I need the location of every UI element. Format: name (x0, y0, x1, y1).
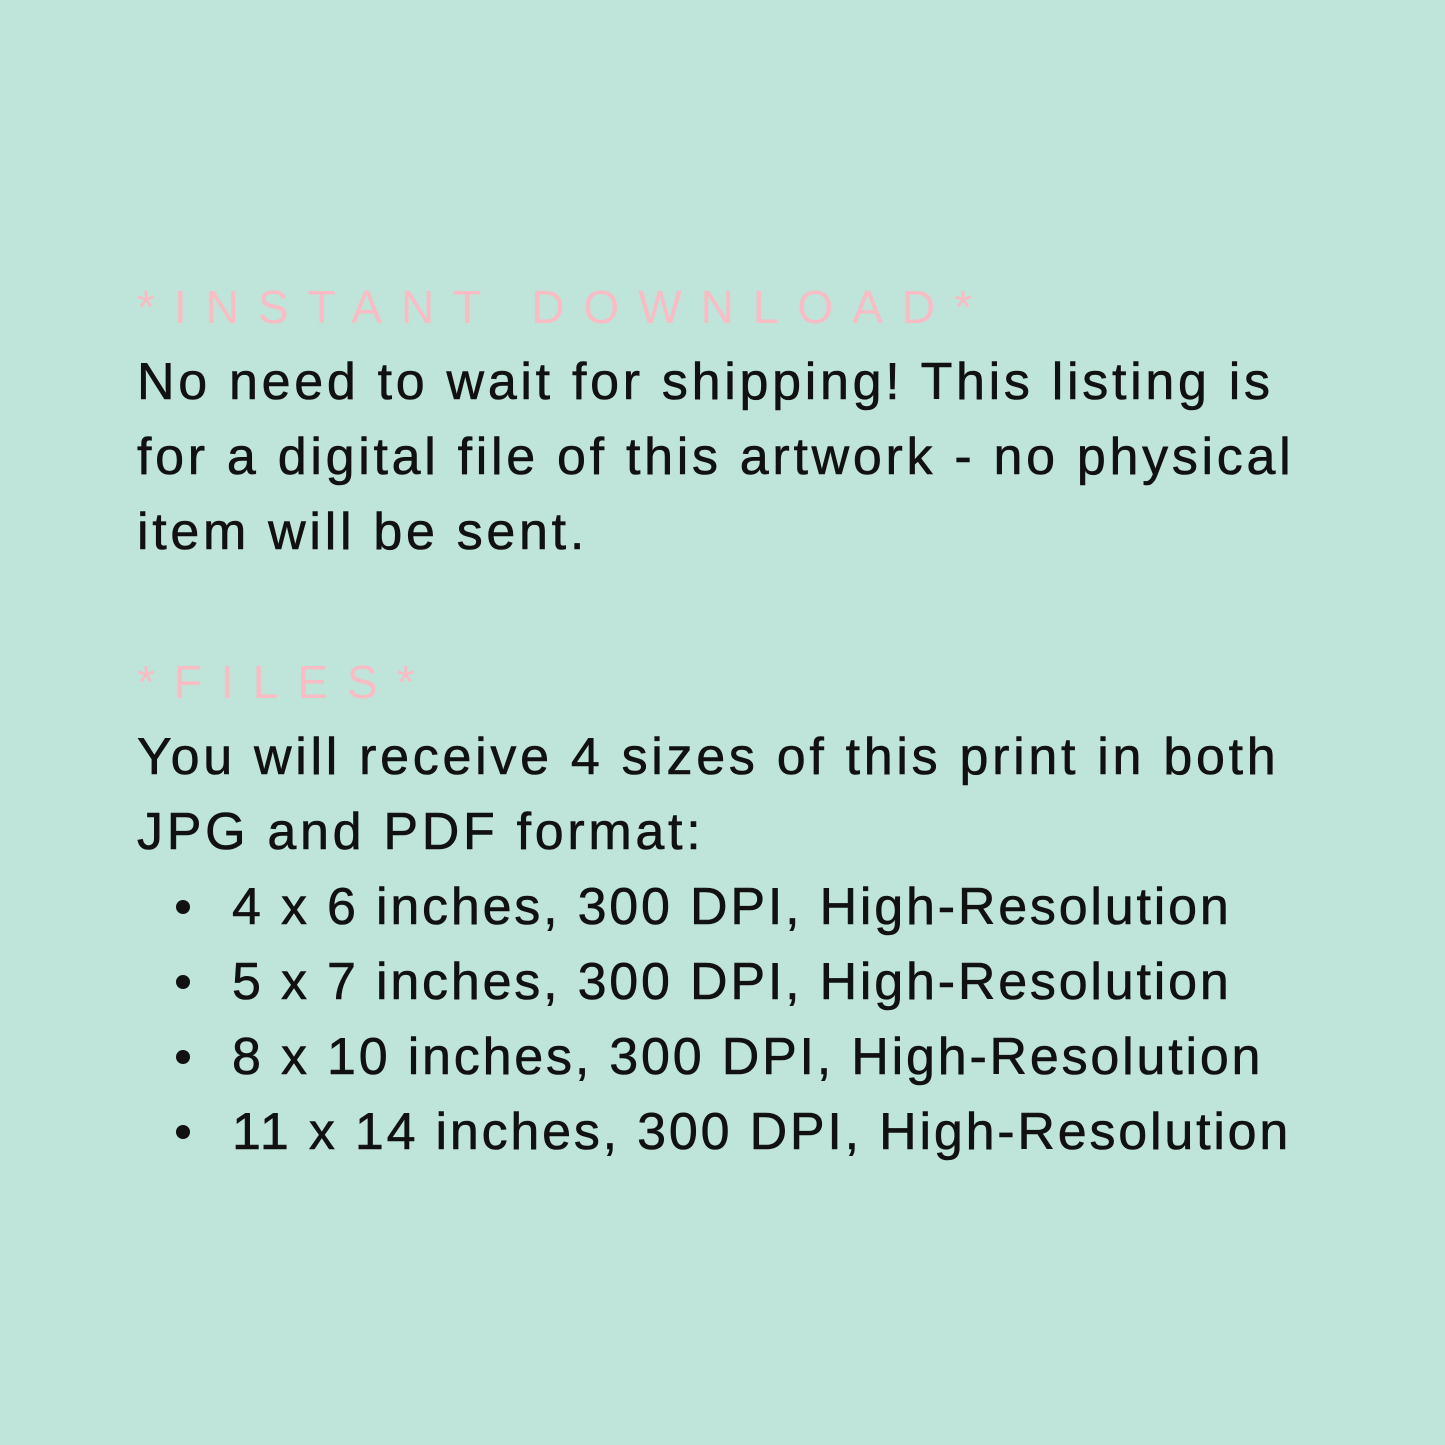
text block: files description: JPG and PDF format: (137, 803, 704, 861)
text block: instant download description (137, 353, 1294, 561)
list: file sizes: 11 x 14 inches, 300 DPI, High-Resolution (232, 1103, 1291, 1161)
list: file sizes: 5 x 7 inches, 300 DPI, High-Resolution (232, 953, 1232, 1011)
text block: instant download description: No need to wait for shipping! This listing is (137, 353, 1274, 411)
list: file sizes: 8 x 10 inches, 300 DPI, High-Resolution (232, 1028, 1263, 1086)
heading: instant download: *INSTANT DOWNLOAD* (137, 281, 991, 333)
list: file sizes (176, 878, 1291, 1161)
heading: files: *FILES* (137, 656, 434, 708)
text block: instant download description: for a digital file of this artwork - no physical (137, 428, 1294, 486)
list: file sizes: 4 x 6 inches, 300 DPI, High-Resolution (232, 878, 1232, 936)
text block: files description (137, 728, 1279, 861)
text block: files description: You will receive 4 sizes of this print in both (137, 728, 1279, 786)
text block: instant download description: item will be sent. (137, 503, 588, 561)
